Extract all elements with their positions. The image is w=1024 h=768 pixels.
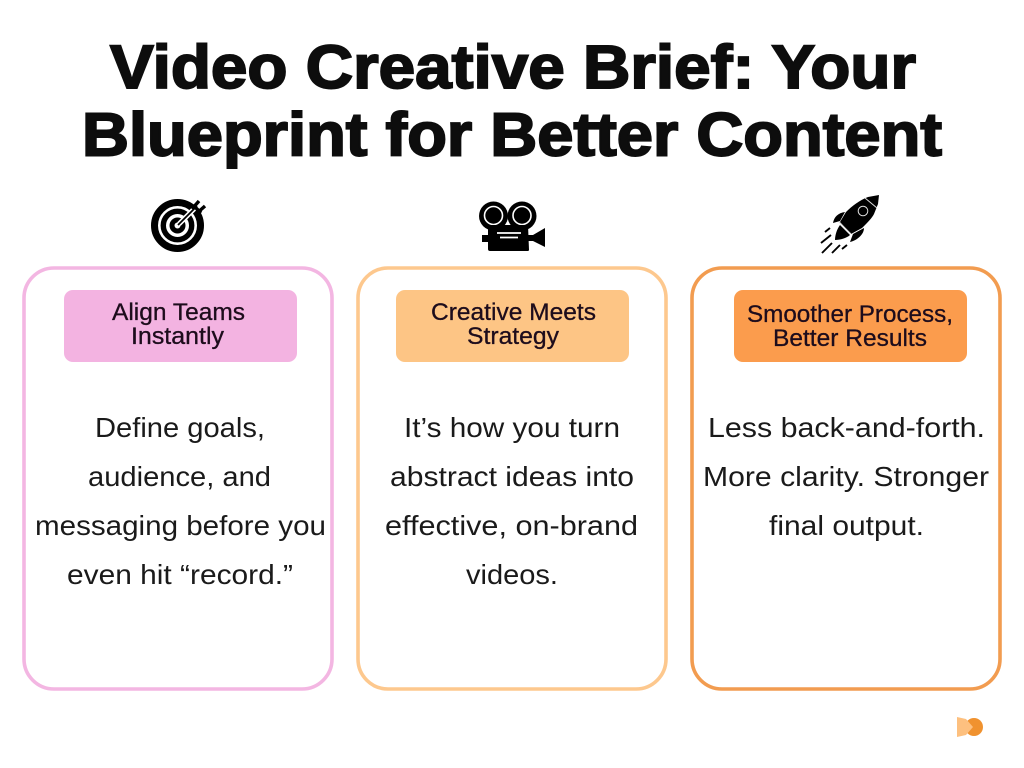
body text: videos. bbox=[466, 559, 558, 590]
body text: More clarity. Stronger bbox=[703, 461, 989, 492]
panel: align teams bbox=[24, 268, 332, 689]
title: Blueprint for Better Content bbox=[82, 100, 942, 168]
label: align teams: Instantly bbox=[131, 323, 224, 350]
label: smoother process: Better Results bbox=[773, 325, 927, 352]
card outline bbox=[358, 268, 666, 689]
label: smoother process: Smoother Process, bbox=[747, 301, 953, 328]
icon: video camera bbox=[479, 202, 545, 251]
body text: final output. bbox=[769, 510, 924, 541]
icon: target bbox=[154, 201, 205, 248]
label: creative meets strategy: Creative Meets bbox=[431, 299, 596, 326]
body text: It’s how you turn bbox=[404, 412, 620, 443]
body text bbox=[703, 412, 989, 541]
card outline bbox=[692, 268, 1000, 689]
label: align teams: Align Teams bbox=[112, 299, 245, 326]
label: align teams bbox=[64, 290, 297, 362]
body text: abstract ideas into bbox=[390, 461, 634, 492]
body text: messaging before you bbox=[35, 510, 326, 541]
icon: rocket bbox=[821, 195, 879, 253]
label: creative meets strategy: Strategy bbox=[467, 323, 559, 350]
card outline bbox=[24, 268, 332, 689]
label: smoother process bbox=[734, 290, 967, 362]
panel: creative meets strategy bbox=[358, 268, 666, 689]
body text bbox=[385, 412, 638, 590]
icon: brand logo bbox=[957, 717, 983, 737]
body text bbox=[35, 412, 326, 590]
body text: Define goals, bbox=[95, 412, 265, 443]
body text: effective, on-brand bbox=[385, 510, 638, 541]
panel: smoother process bbox=[692, 268, 1000, 689]
title: Video Creative Brief: Your bbox=[110, 33, 916, 101]
label: creative meets strategy bbox=[396, 290, 629, 362]
body text: audience, and bbox=[88, 461, 271, 492]
title bbox=[82, 33, 942, 168]
body text: Less back-and-forth. bbox=[708, 412, 985, 443]
body text: even hit “record.” bbox=[67, 559, 293, 590]
